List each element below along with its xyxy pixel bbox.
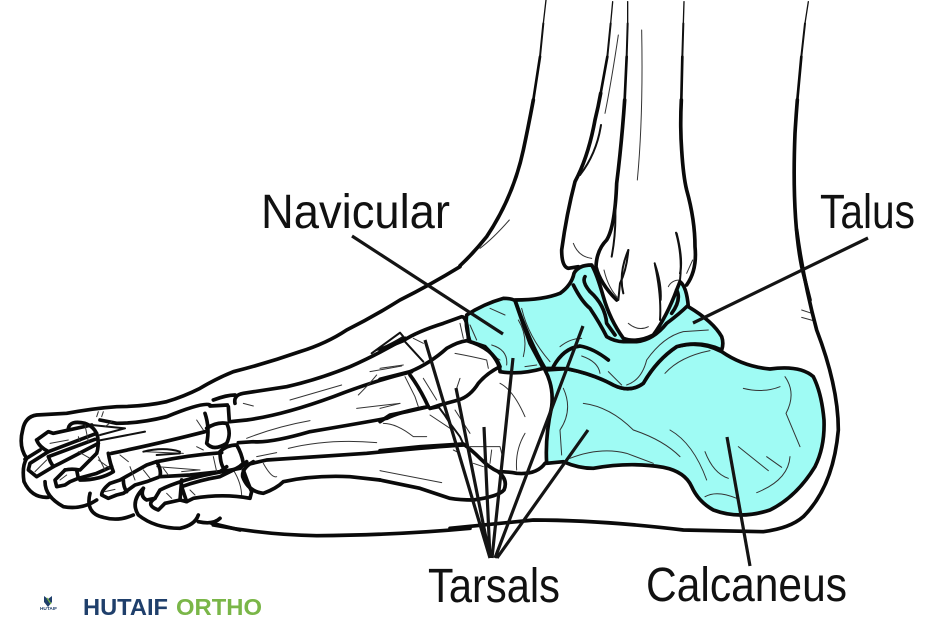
cuneiforms, cuboid and first metatarsal base (380, 317, 545, 500)
joint bones of the forefoot (205, 395, 243, 472)
third and big toe pads (89, 488, 240, 530)
label: Talus: Talus (820, 186, 915, 239)
logo mark (40, 596, 57, 611)
label: Tarsals: Tarsals (428, 560, 560, 613)
brand name (83, 594, 262, 620)
brand name: ORTHO (176, 594, 262, 620)
logo mark: HUTAIF (40, 606, 57, 611)
label: Calcaneus: Calcaneus (646, 559, 847, 612)
calcaneus leader (727, 437, 750, 566)
metatarsal lines (235, 338, 405, 403)
label: Navicular: Navicular (261, 186, 450, 239)
navicular leader (352, 236, 503, 334)
talus inner contour lines (553, 277, 687, 367)
distal tibia shading (622, 233, 681, 320)
calcaneus bone (545, 344, 824, 515)
foot top and toe outline (21, 267, 460, 458)
leader lines (352, 236, 868, 566)
outer toe pads (23, 458, 97, 507)
brand name: HUTAIF (83, 594, 168, 620)
foot skin, metatarsals and proximal phalanges (21, 267, 470, 536)
talus leader (693, 238, 868, 323)
lower leg outlines and tibia and fibula (460, 0, 810, 300)
panel: coloured tarsal bones and heel (450, 230, 838, 532)
navicular bone (466, 298, 543, 373)
third and big toes detail (80, 449, 252, 530)
tarsals leaders (425, 326, 588, 558)
talus bone (515, 265, 723, 389)
second toe phalanx upper lines (100, 404, 210, 453)
bone surface shading (480, 308, 800, 498)
heel skin and sole outline (450, 230, 838, 532)
sole (213, 525, 470, 536)
bone shading (380, 323, 525, 483)
metatarsal shading (157, 366, 402, 497)
little toes detail (25, 412, 145, 487)
